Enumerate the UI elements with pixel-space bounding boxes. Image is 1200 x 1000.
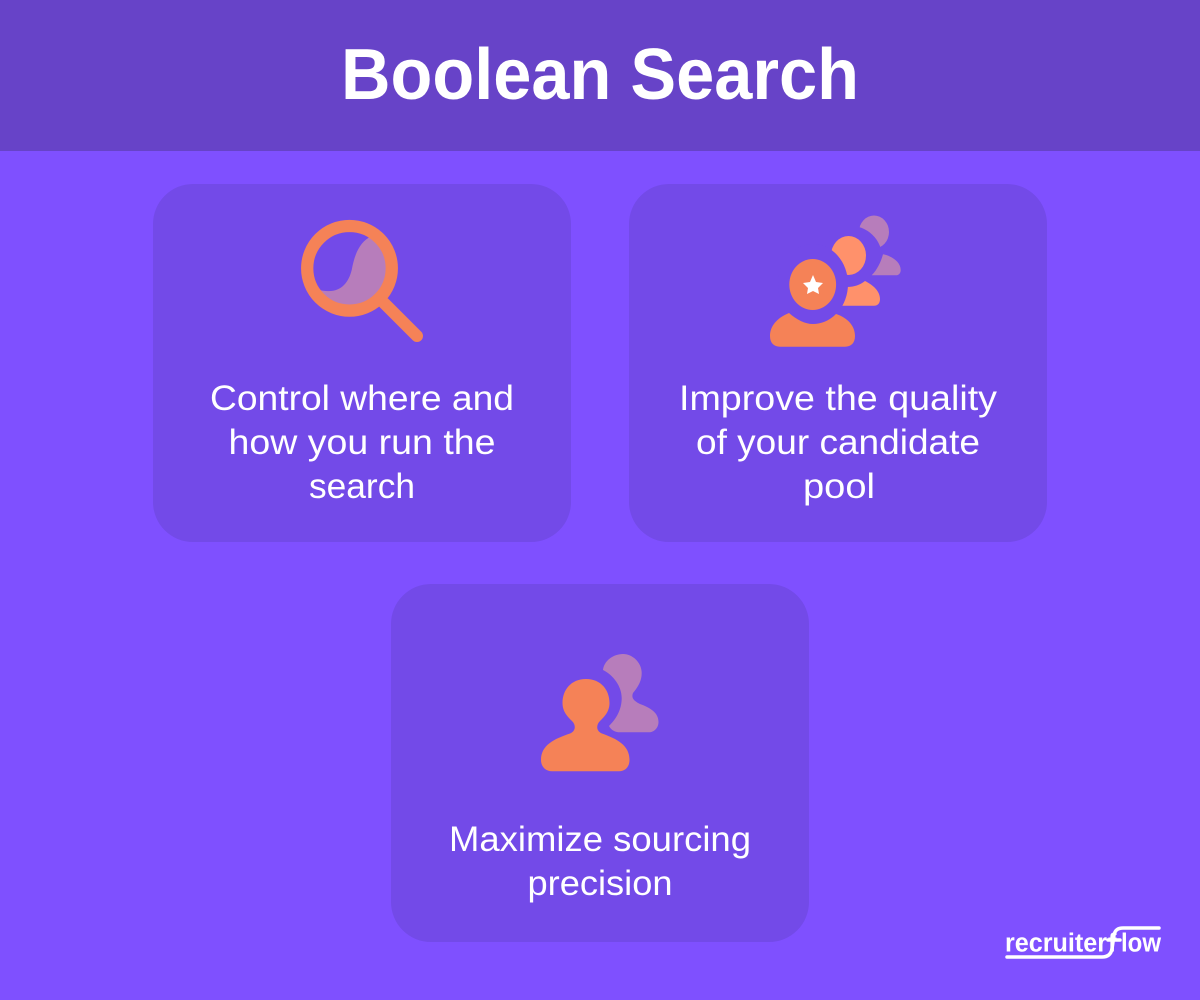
back person <box>816 216 901 288</box>
logo: recruiterflow <box>1005 928 1161 958</box>
text: control where and how: search <box>309 467 415 506</box>
icon: ranked candidates <box>770 216 901 347</box>
icon: two people <box>541 654 658 771</box>
text: improve quality: pool <box>803 467 875 506</box>
icon: magnifying glass <box>307 226 417 336</box>
middle person <box>831 236 880 306</box>
header band <box>0 0 1200 151</box>
text: control where and how: Control where and <box>210 379 514 418</box>
text: improve quality: Improve the quality <box>679 379 998 418</box>
front person <box>770 244 855 347</box>
text: control where and how <box>210 379 514 506</box>
panel: sourcing precision <box>391 584 809 942</box>
panel: candidate quality <box>629 184 1047 542</box>
text: improve quality <box>679 379 998 506</box>
panel: control search <box>153 184 571 542</box>
logo: recruiterflow: low <box>1121 930 1161 958</box>
text: improve quality: of your candidate <box>696 423 980 462</box>
text: maximize sourcing precision: Maximize sourcing <box>449 820 751 859</box>
logo: recruiterflow: recruiter <box>1005 930 1107 958</box>
title: Boolean Search <box>341 35 859 115</box>
text: maximize sourcing precision <box>449 820 751 903</box>
icon: star <box>803 275 823 294</box>
logo: recruiterflow: f <box>1108 930 1117 958</box>
text: maximize sourcing precision: precision <box>528 864 672 903</box>
text: control where and how: how you run the <box>228 423 496 462</box>
